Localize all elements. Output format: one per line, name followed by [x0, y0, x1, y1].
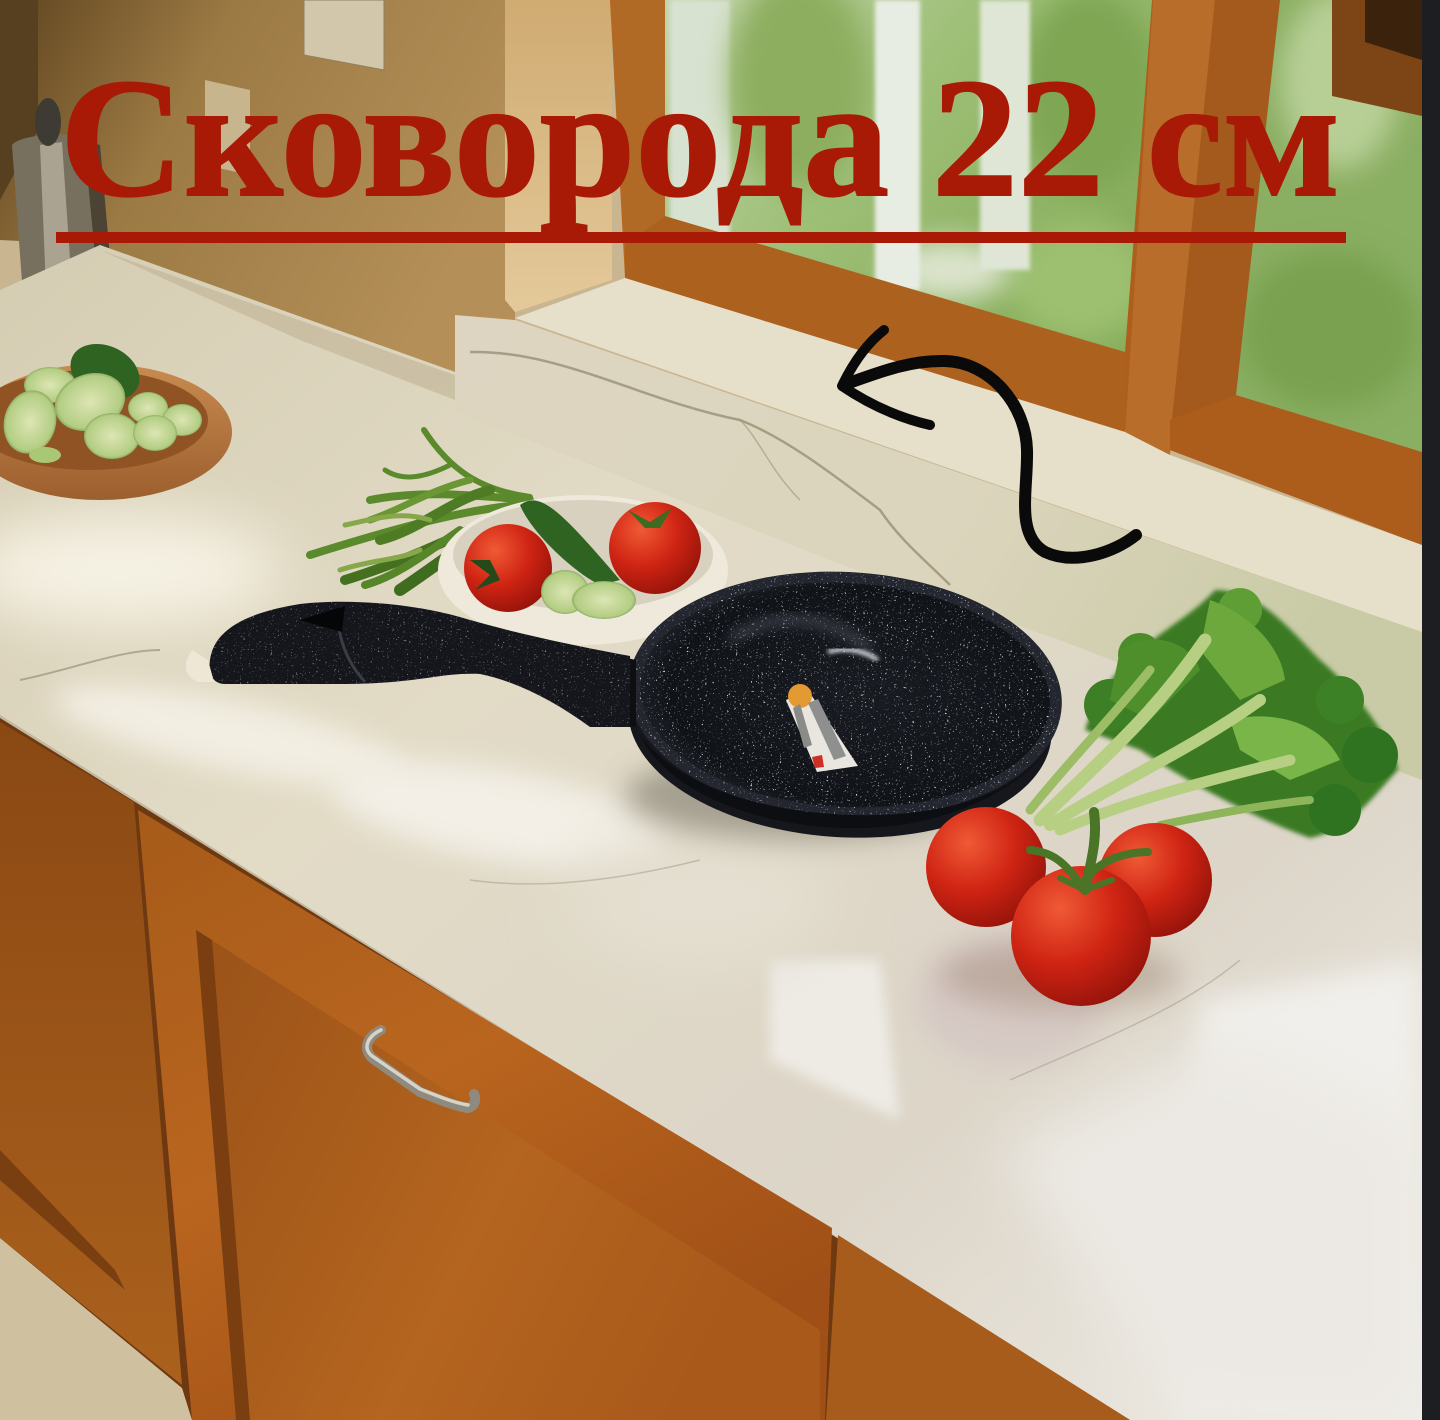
dish with tomatoes and cucumbers: [438, 495, 728, 645]
herbs behind the dish: [310, 430, 530, 590]
pan shadow: [625, 750, 975, 840]
lettuce bunch: [1030, 588, 1398, 838]
title: Сковорода 22 см: [60, 44, 1340, 232]
window glass and garden: [665, 0, 1422, 452]
window frame: [610, 0, 1422, 545]
steel canister: [12, 98, 112, 292]
product label sticker: [786, 684, 858, 772]
marble window sill: [455, 278, 1422, 780]
handle bracket: [600, 652, 636, 727]
granite speckles: [625, 570, 1065, 820]
screenshot edge strip: [1422, 0, 1440, 1420]
wall socket plates: [205, 0, 384, 175]
window reveal: [505, 0, 612, 312]
frying pan: [186, 561, 1068, 852]
tomatoes: [926, 807, 1212, 1010]
pan rim and interior: [622, 561, 1068, 829]
bowl of cucumbers: [0, 333, 232, 500]
cabinet handle: [367, 1030, 475, 1108]
curved arrow pointing to the window: [842, 330, 1136, 558]
handle: [210, 602, 630, 727]
handle end highlight: [186, 650, 214, 682]
pan outer body: [620, 592, 1060, 852]
pan lower wall: [640, 735, 1050, 828]
title underline: [56, 232, 1346, 243]
cabinets: [0, 718, 1130, 1420]
